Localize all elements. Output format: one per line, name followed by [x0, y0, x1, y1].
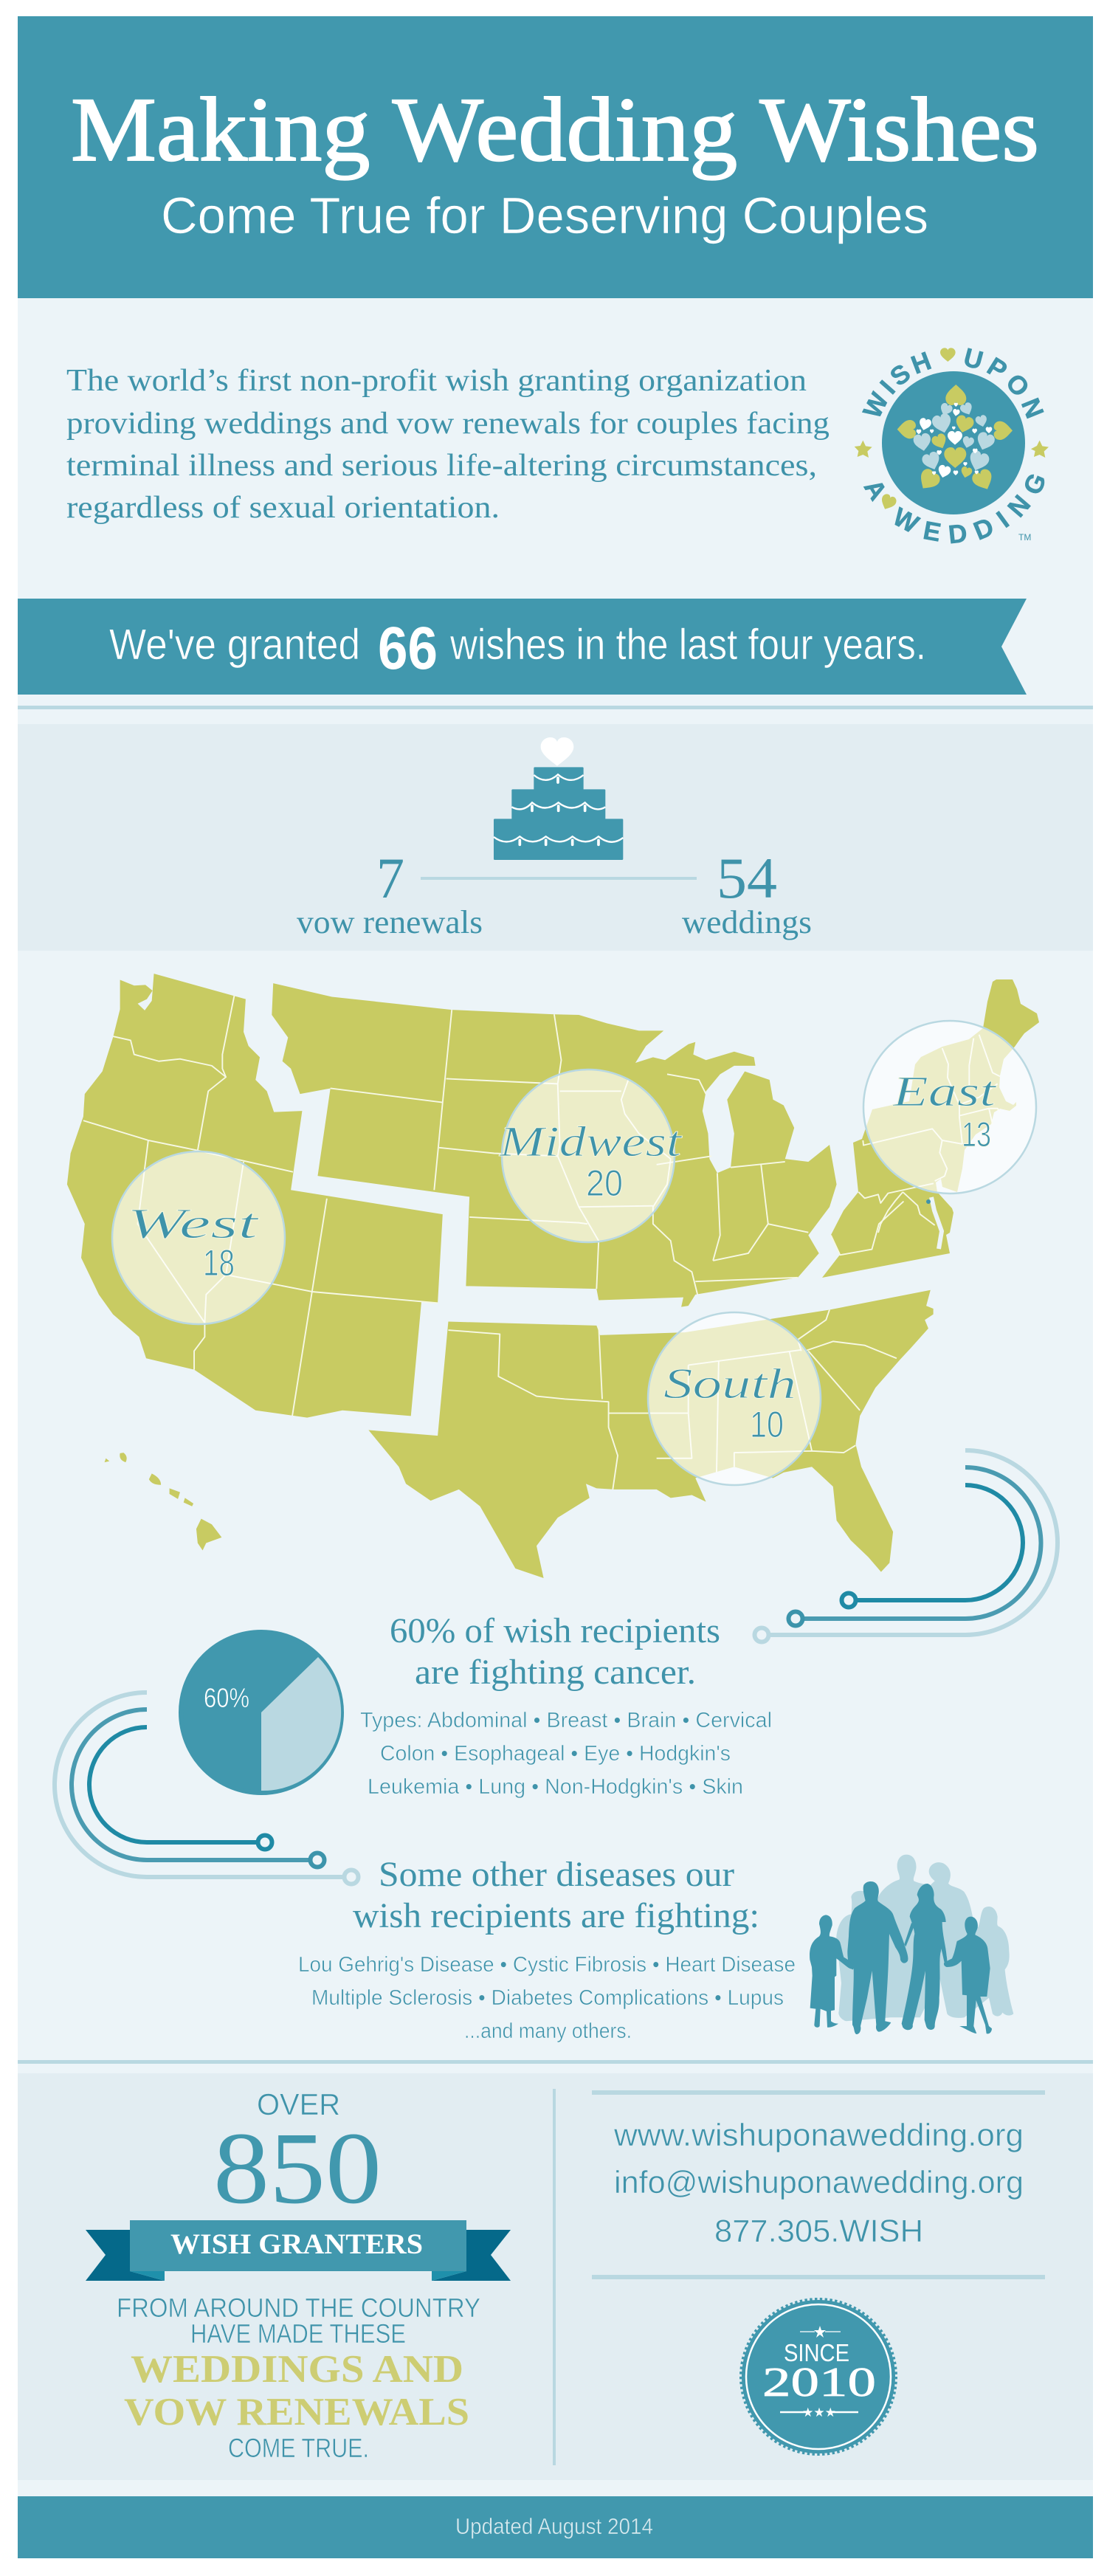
intro text block — [66, 364, 830, 525]
heading: cancer statistic: 60% of wish recipients — [390, 1611, 720, 1650]
region: East: 13 — [962, 1115, 991, 1154]
banner: wishes granted: We've granted — [109, 621, 360, 669]
region: South — [648, 1312, 821, 1485]
map regions — [67, 974, 934, 1578]
connector arcs: map to cancer section — [754, 1450, 1058, 1642]
text: disease list: Lou Gehrig's Disease • Cystic Fibrosis • Heart Disease — [298, 1953, 796, 1977]
map of the United States — [67, 974, 1039, 1578]
heading: other diseases — [353, 1855, 759, 1935]
region: South: South — [663, 1360, 796, 1408]
region: South: 10 — [750, 1404, 784, 1445]
badge: since 2010 — [741, 2299, 896, 2454]
text: disease list — [298, 1953, 796, 2043]
footer bar — [18, 2496, 1093, 2558]
trademark: TM — [1018, 532, 1031, 543]
region: Midwest — [499, 1070, 683, 1242]
icon: family silhouettes — [810, 1855, 1013, 2034]
logo ring text: WISH — [862, 351, 931, 416]
stat: 7 vow renewals: vow renewals — [297, 904, 483, 940]
text: cancer types: Types: Abdominal • Breast • Brain • Cervical — [360, 1709, 772, 1732]
text: cancer types: Leukemia • Lung • Non-Hodgkin's • Skin — [368, 1775, 743, 1799]
stat: 54 weddings — [682, 846, 812, 940]
banner: wishes granted — [18, 599, 1027, 695]
ribbon: wish granters — [86, 2220, 511, 2281]
region: West: West — [127, 1199, 260, 1247]
text: contact details: info@wishuponawedding.org — [614, 2165, 1024, 2200]
state borders — [83, 995, 903, 1490]
text: contact details — [613, 2118, 1024, 2249]
region: West: 18 — [203, 1242, 235, 1284]
stat: 54 weddings: 54 — [717, 846, 777, 910]
text: from around the country: VOW RENEWALS — [124, 2391, 469, 2434]
title: Making Wedding Wishes — [71, 79, 1039, 180]
icon: Wish Upon A Wedding logo — [855, 348, 1049, 543]
text: cancer types — [360, 1709, 772, 1799]
badge: since 2010: 2010 — [762, 2360, 876, 2405]
region: East: East — [892, 1067, 998, 1115]
badge: since 2010: ★★★ — [802, 2405, 836, 2420]
text: from around the country: WEDDINGS AND — [131, 2348, 463, 2391]
text: from around the country: HAVE MADE THESE — [190, 2318, 406, 2349]
text: contact details: www.wishuponawedding.org — [613, 2118, 1024, 2153]
badge: since 2010: SINCE — [784, 2339, 849, 2366]
Hawaii — [105, 1453, 221, 1551]
text: contact details: 877.305.WISH — [714, 2214, 923, 2249]
heading: cancer statistic: are fighting cancer. — [415, 1653, 696, 1692]
logo ring text: WEDDING — [894, 474, 1045, 543]
panel: wish granters and contact — [18, 2073, 1093, 2480]
text: from around the country — [117, 2293, 480, 2463]
logo ring text — [862, 348, 1045, 543]
footer bar: Updated August 2014 — [455, 2513, 653, 2539]
intro text block: regardless of sexual orientation. — [66, 491, 500, 525]
number: 66 wishes: 66 — [378, 615, 438, 682]
panel: ceremony counts — [18, 724, 1093, 951]
subtitle: Come True for Deserving Couples — [161, 187, 928, 244]
heading: other diseases: wish recipients are fighting: — [353, 1896, 759, 1935]
region: Midwest: Midwest — [499, 1117, 683, 1165]
connector arcs: cancer to other diseases — [55, 1692, 359, 1884]
ribbon: wish granters: WISH GRANTERS — [170, 2228, 423, 2260]
logo ring text: UPON — [965, 348, 1044, 419]
logo hearts and stars — [855, 348, 1049, 512]
icon: wedding cake — [494, 737, 623, 860]
banner: wishes granted: wishes in the last four years. — [449, 621, 926, 669]
text: from around the country: COME TRUE. — [228, 2433, 369, 2463]
text: disease list: Multiple Sclerosis • Diabetes Complications • Lupus — [311, 1986, 784, 2010]
region: Midwest: 20 — [586, 1163, 623, 1204]
stat: 7 vow renewals — [297, 846, 483, 940]
intro text block: providing weddings and vow renewals for couples facing — [66, 407, 830, 441]
region: West — [112, 1151, 285, 1324]
text: over 850: OVER — [257, 2087, 340, 2121]
heading: other diseases: Some other diseases our — [379, 1855, 734, 1894]
stat: 54 weddings: weddings — [682, 904, 812, 940]
intro text block: terminal illness and serious life-altering circumstances, — [66, 449, 817, 483]
region: East — [863, 1021, 1036, 1194]
text: over 850: 850 — [213, 2112, 382, 2225]
stat: 7 vow renewals: 7 — [376, 846, 404, 910]
intro text block: The world’s first non-profit wish granting organization — [66, 364, 807, 398]
logo ring text: A — [863, 483, 885, 502]
East region shape — [822, 979, 1039, 1278]
header banner — [18, 16, 1093, 298]
text: cancer types: Colon • Esophageal • Eye • Hodgkin's — [380, 1742, 731, 1766]
heading: cancer statistic — [390, 1611, 720, 1692]
chart: 60 percent pie — [181, 1632, 342, 1793]
text: disease list: ...and many others. — [464, 2019, 632, 2043]
text: from around the country: FROM AROUND THE COUNTRY — [117, 2293, 480, 2323]
chart: 60 percent pie: 60% — [204, 1683, 249, 1713]
